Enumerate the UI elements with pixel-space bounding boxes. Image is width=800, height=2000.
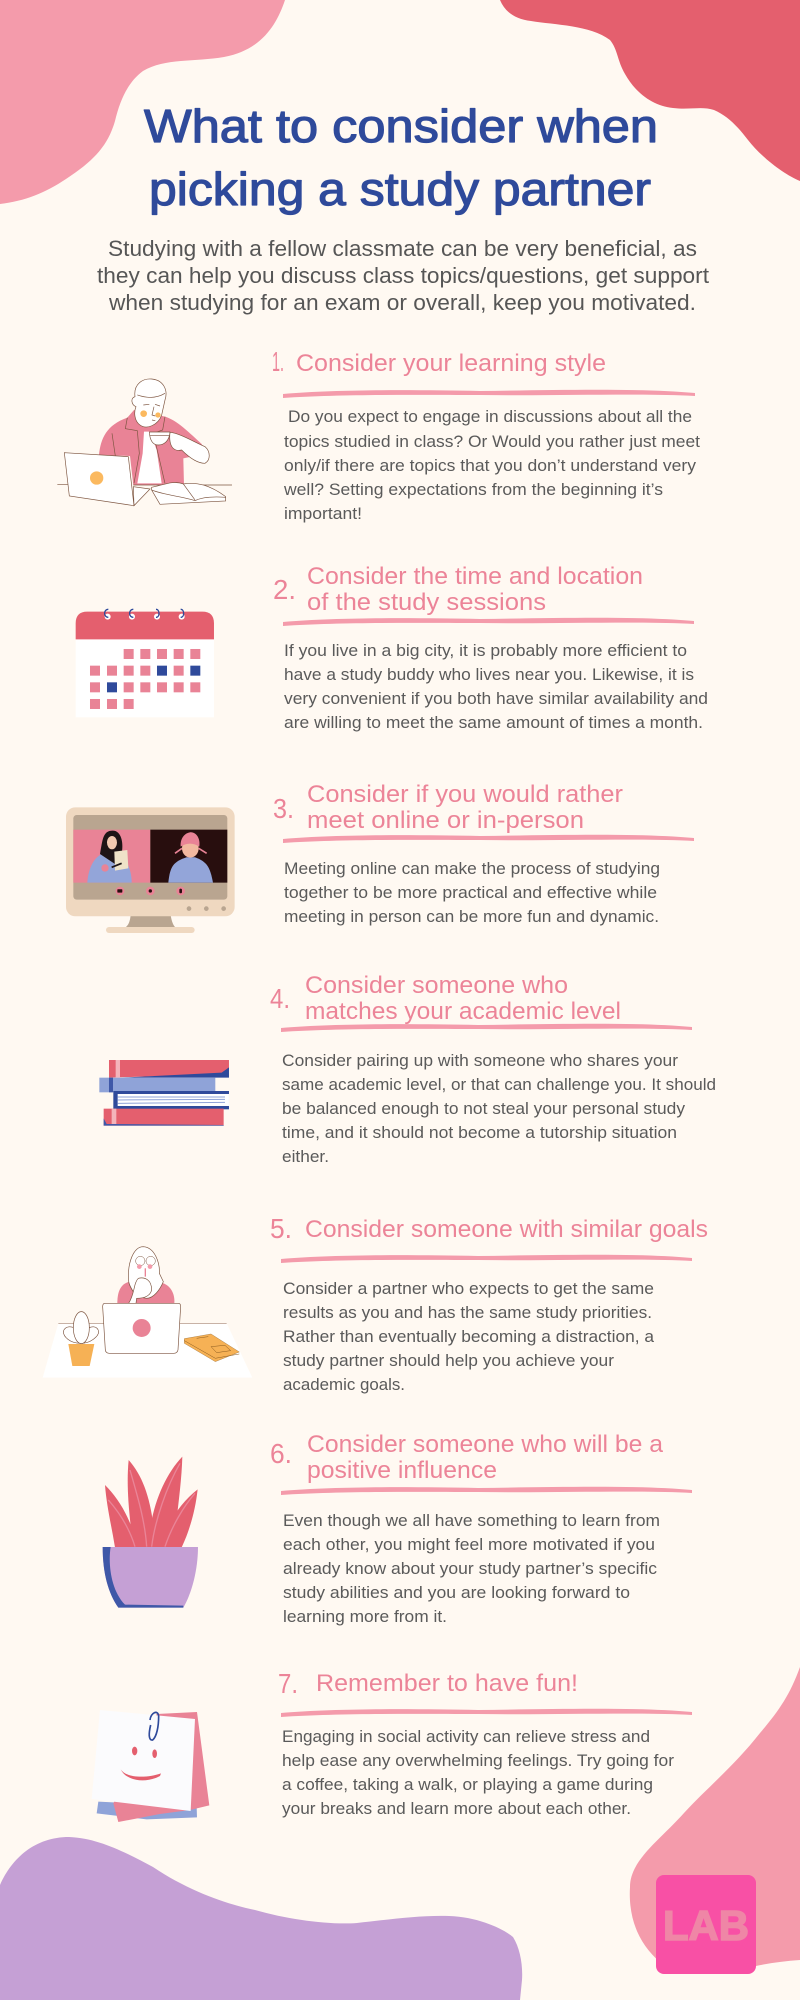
title: picking a study partner (149, 163, 651, 215)
body text: Engaging in social activity can relieve stress and (282, 1727, 650, 1746)
intro text: Studying with a fellow classmate can be very beneficial, as (108, 236, 697, 261)
body text: only/if there are topics that you don’t understand very (284, 456, 697, 475)
body text: your breaks and learn more about each other. (282, 1799, 631, 1818)
underline (283, 390, 695, 398)
heading: Consider someone with similar goals (305, 1216, 708, 1243)
body text: Do you expect to engage in discussions about all the (288, 407, 692, 426)
body text: study partner should help you achieve your (283, 1351, 614, 1370)
heading: 3. (273, 793, 294, 824)
body text: same academic level, or that can challenge you. It should (282, 1075, 716, 1094)
heading: 2. (273, 574, 296, 605)
icon: woman at desk with laptop (43, 1247, 252, 1378)
body text: a coffee, taking a walk, or playing a game during (282, 1775, 653, 1794)
heading: Remember to have fun! (316, 1670, 578, 1697)
body text: help ease any overwhelming feelings. Try going for (282, 1751, 674, 1770)
body text (283, 407, 700, 523)
body text: If you live in a big city, it is probably more efficient to (284, 641, 687, 660)
intro text: they can help you discuss class topics/questions, get support (97, 263, 709, 288)
heading (270, 1431, 664, 1484)
body text: Consider a partner who expects to get the same (283, 1279, 654, 1298)
heading: Consider if you would rather (307, 781, 623, 808)
body text (282, 1051, 716, 1166)
icon: video call on monitor (66, 807, 235, 933)
heading: matches your academic level (305, 998, 621, 1025)
intro text (97, 236, 709, 315)
body text: well? Setting expectations from the beginning it’s (283, 480, 663, 499)
underline (283, 835, 694, 843)
heading: 4. (270, 983, 290, 1014)
heading: Consider someone who will be a (307, 1431, 664, 1458)
heading: Consider your learning style (296, 350, 606, 377)
body text: Even though we all have something to learn from (283, 1511, 660, 1530)
body text (282, 1727, 674, 1818)
underline (281, 1024, 692, 1032)
blob: top left (0, 0, 285, 204)
section 6: positive influence (103, 1431, 692, 1626)
body text (284, 641, 708, 732)
blob: bottom left (0, 1837, 522, 2000)
icon: calendar (76, 609, 214, 717)
heading: Consider the time and location (307, 563, 643, 590)
section 5: similar goals (43, 1213, 708, 1394)
logo: LAB (656, 1875, 756, 1974)
icon: sticky notes with smiley (92, 1710, 209, 1822)
body text: together to be more practical and effective while (284, 883, 657, 902)
underline (281, 1255, 692, 1263)
heading: 5. (270, 1213, 292, 1244)
section 3: online or in-person (66, 781, 694, 933)
body text (284, 859, 660, 926)
body text: important! (284, 504, 362, 523)
body text: are willing to meet the same amount of times a month. (284, 713, 703, 732)
body text: have a study buddy who lives near you. Likewise, it is (284, 665, 694, 684)
intro text: when studying for an exam or overall, keep you motivated. (108, 290, 696, 315)
section 7: have fun (92, 1668, 692, 1822)
icon: potted plant (103, 1457, 198, 1608)
heading: 1. (272, 346, 284, 377)
heading: positive influence (307, 1457, 497, 1484)
title (144, 100, 658, 215)
body text: study abilities and you are looking forward to (283, 1583, 630, 1602)
icon: man with coffee and laptop (57, 379, 232, 506)
body text: academic goals. (283, 1375, 405, 1394)
heading: meet online or in-person (307, 807, 584, 834)
underline (283, 618, 694, 626)
title: What to consider when (144, 100, 658, 152)
body text: already know about your study partner’s specific (283, 1559, 658, 1578)
body text: time, and it should not become a tutorship situation (282, 1123, 677, 1142)
body text: topics studied in class? Or Would you rather just meet (284, 432, 700, 451)
section 4: academic level (99, 972, 716, 1166)
icon: stack of books (99, 1060, 229, 1126)
body text: each other, you might feel more motivated if you (283, 1535, 655, 1554)
body text: Rather than eventually becoming a distraction, a (283, 1327, 655, 1346)
heading: of the study sessions (307, 589, 546, 616)
heading: 6. (270, 1438, 292, 1469)
body text: be balanced enough to not steal your personal study (282, 1099, 686, 1118)
section 2: time and location (76, 563, 708, 732)
underline (281, 1487, 692, 1495)
body text: very convenient if you both have similar availability and (284, 689, 708, 708)
body text: meeting in person can be more fun and dynamic. (284, 907, 659, 926)
logo: LAB: LAB (663, 1902, 749, 1949)
section 1: learning style (57, 346, 700, 523)
heading (270, 972, 621, 1025)
body text (283, 1279, 655, 1394)
blob: bottom right (630, 1667, 800, 1966)
body text: Consider pairing up with someone who shares your (282, 1051, 678, 1070)
body text: learning more from it. (283, 1607, 447, 1626)
underline (281, 1709, 692, 1717)
body text (283, 1511, 660, 1626)
heading (273, 781, 623, 834)
heading (273, 563, 643, 616)
blob: top right (500, 0, 800, 181)
body text: results as you and has the same study priorities. (283, 1303, 652, 1322)
body text: Meeting online can make the process of studying (284, 859, 660, 878)
body text: either. (282, 1147, 329, 1166)
heading: 7. (278, 1668, 298, 1699)
heading: Consider someone who (305, 972, 568, 999)
